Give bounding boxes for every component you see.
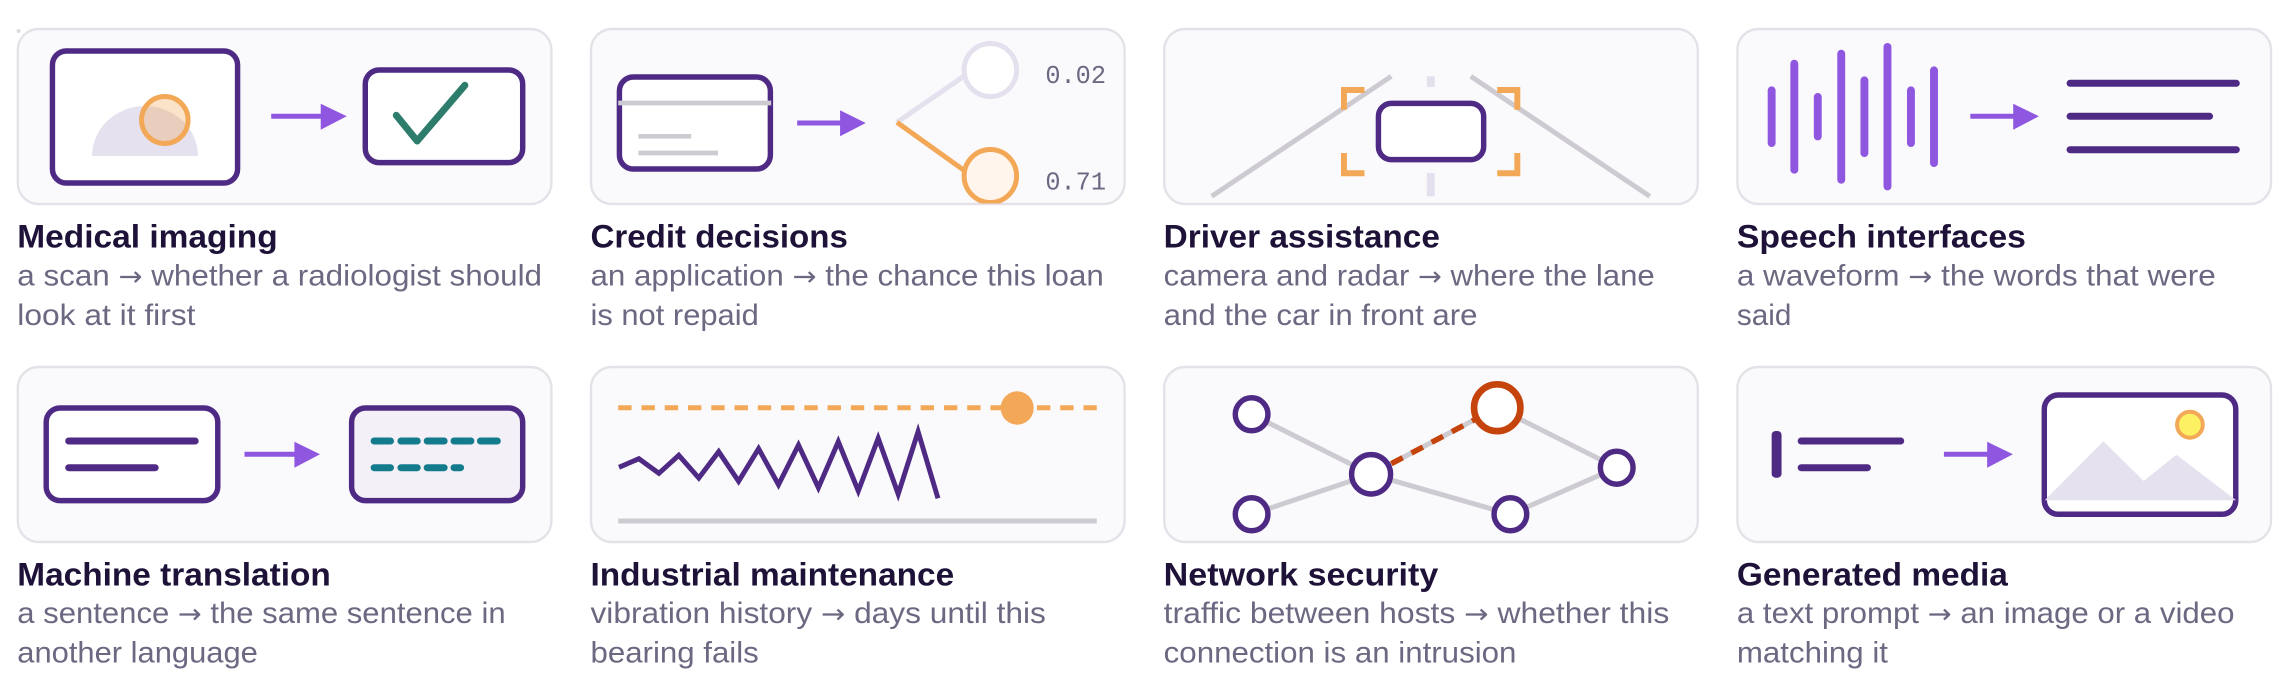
- panel: speech interfaces: [1737, 29, 2271, 332]
- panel: medical imaging: [17, 29, 551, 332]
- description: an application → the chance this loan: [590, 259, 1104, 293]
- description: a sentence → the same sentence in: [17, 597, 506, 630]
- card background: [18, 367, 551, 542]
- description: [1164, 259, 1655, 332]
- arrow: [244, 442, 320, 468]
- description: look at it first: [17, 299, 195, 332]
- icon: road with detected car: [1212, 76, 1650, 196]
- diagram: network graph: [1235, 384, 1633, 531]
- description: and the car in front are: [1164, 299, 1478, 332]
- arrow: [1970, 104, 2039, 130]
- heading: Machine translation: [17, 556, 331, 593]
- description: matching it: [1737, 636, 1888, 670]
- icon: text prompt: [1772, 431, 1901, 478]
- card background: [1737, 367, 2271, 542]
- heading: Industrial maintenance: [590, 556, 954, 593]
- card background: [1164, 367, 1698, 542]
- icon: application form: [618, 77, 771, 169]
- description: a text prompt → an image or a video: [1737, 597, 2234, 630]
- icon: check result: [365, 70, 523, 163]
- heading: Driver assistance: [1164, 218, 1440, 255]
- description: another language: [17, 636, 258, 670]
- card background: [18, 29, 551, 204]
- card background: [591, 29, 1125, 204]
- threshold line with marker: [618, 391, 1097, 425]
- heading: Medical imaging: [17, 218, 278, 255]
- card background: [1164, 29, 1698, 204]
- icon: generated image: [2044, 395, 2236, 514]
- panel: industrial maintenance: [590, 367, 1125, 670]
- card background: [591, 367, 1125, 542]
- panel: machine translation: [17, 367, 551, 670]
- description: [17, 259, 542, 332]
- description: connection is an intrusion: [1164, 636, 1516, 670]
- icon: transcript lines: [2070, 83, 2236, 150]
- panel: credit decisions: [590, 29, 1125, 332]
- heading: Credit decisions: [590, 218, 848, 255]
- icon: waveform: [1768, 43, 1938, 190]
- description: is not repaid: [590, 299, 759, 332]
- arrow: [271, 104, 347, 130]
- description: bearing fails: [590, 636, 759, 670]
- description: a scan → whether a radiologist should: [17, 259, 542, 293]
- arrow: [797, 110, 866, 136]
- description: [17, 597, 506, 670]
- chart: probability branches: [897, 44, 1017, 202]
- description: [590, 597, 1046, 670]
- icon: source sentence: [46, 408, 218, 501]
- description: [1164, 597, 1669, 670]
- description: camera and radar → where the lane: [1164, 259, 1655, 293]
- card background: [1737, 29, 2271, 204]
- panel: driver assistance: [1164, 29, 1698, 332]
- panel: network security: [1164, 367, 1698, 670]
- description: [1737, 259, 2216, 332]
- description: vibration history → days until this: [590, 597, 1046, 630]
- value: low probability: 0.02: [1045, 62, 1106, 91]
- chart: vibration history: [619, 432, 938, 498]
- icon: scan with highlighted region: [52, 51, 238, 183]
- description: a waveform → the words that were: [1737, 259, 2216, 293]
- value: high probability: 0.71: [1045, 169, 1106, 198]
- icon: translated sentence: [352, 408, 523, 501]
- heading: Speech interfaces: [1737, 218, 2026, 255]
- heading: Generated media: [1737, 556, 2008, 593]
- arrow: [1944, 442, 2013, 468]
- heading: Network security: [1164, 556, 1439, 593]
- description: [590, 259, 1104, 332]
- time axis: [618, 518, 1097, 524]
- description: said: [1737, 299, 1791, 332]
- description: traffic between hosts → whether this: [1164, 597, 1669, 630]
- description: [1737, 597, 2234, 670]
- panel: generated media: [1737, 367, 2271, 670]
